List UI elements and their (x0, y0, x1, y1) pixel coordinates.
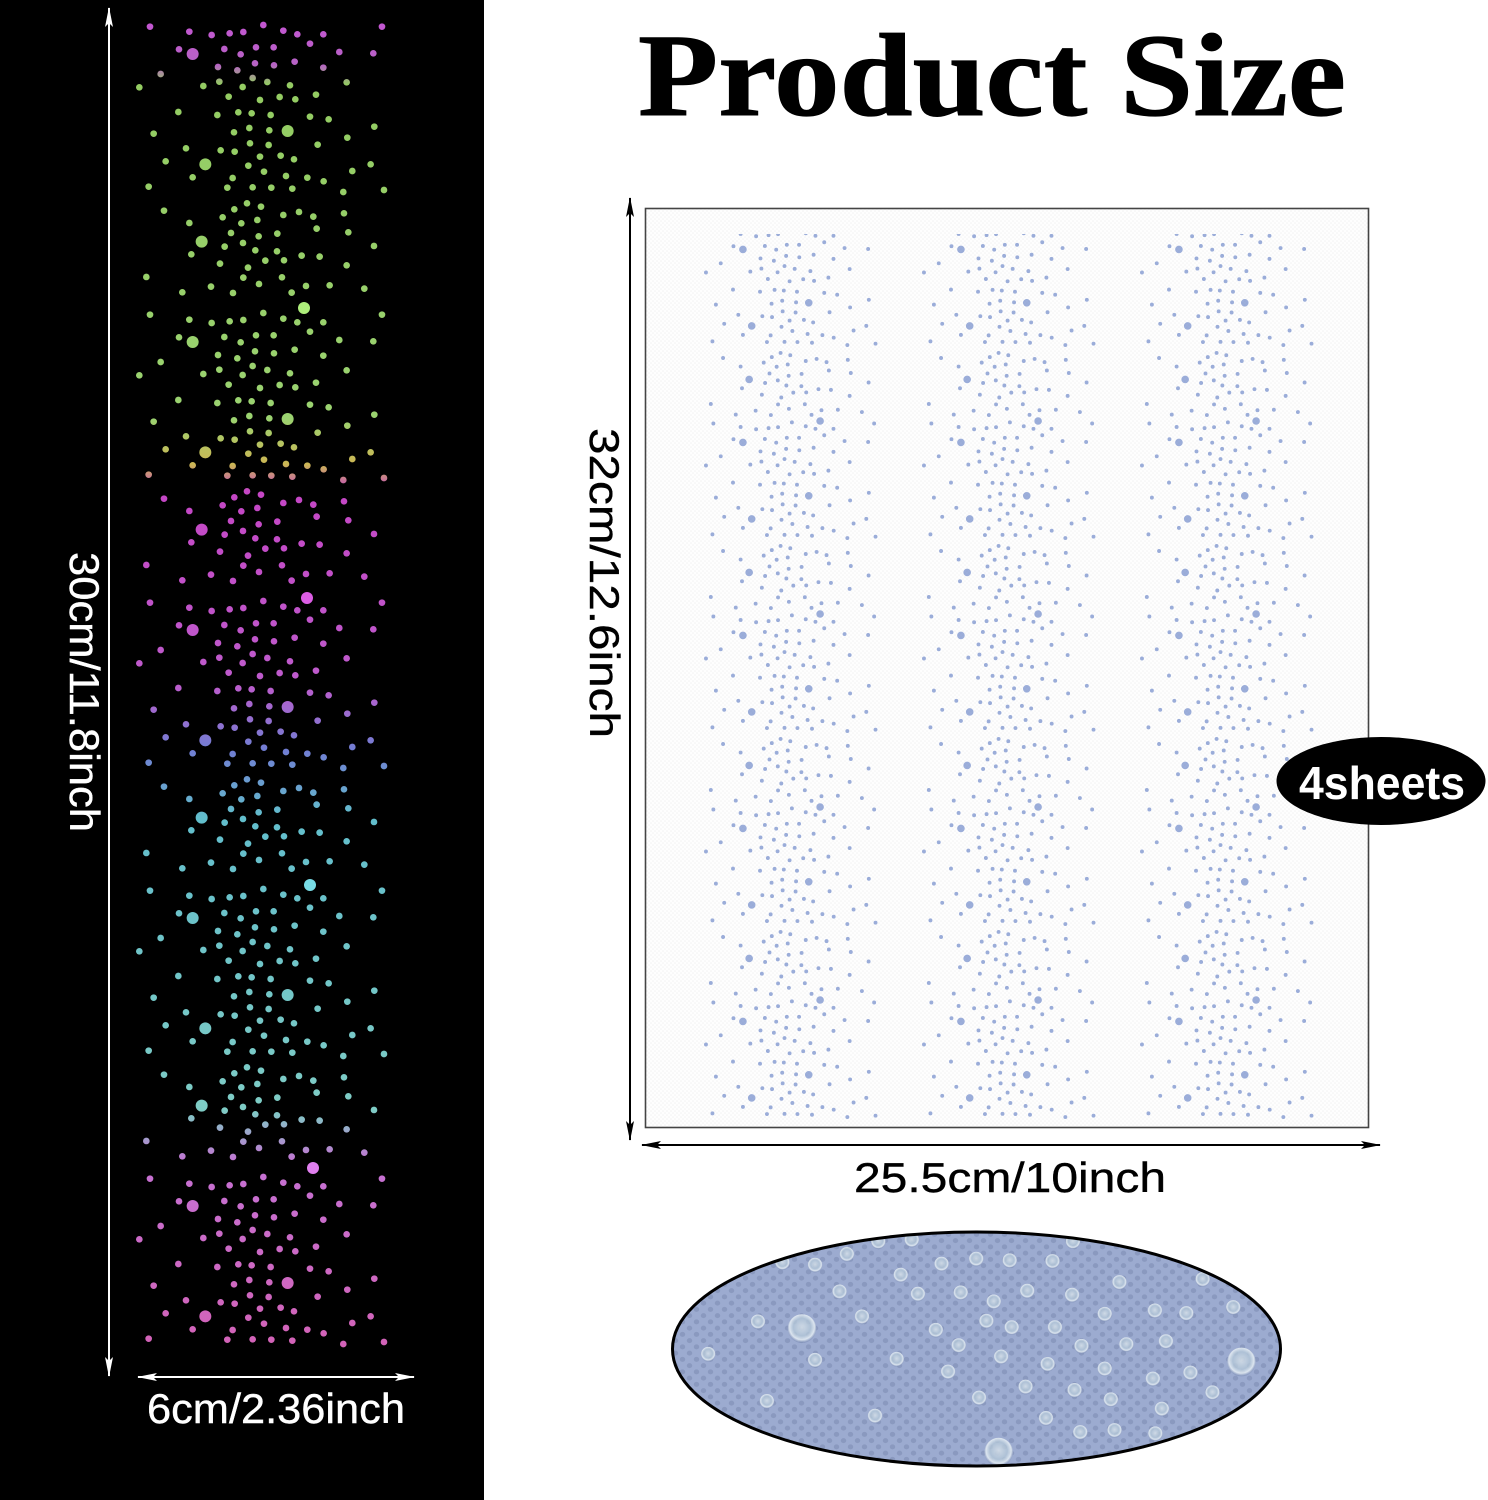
sheet rhinestone columns (700, 234, 1354, 1122)
panel: water droplet close-up (672, 1232, 1280, 1466)
droplets (701, 1233, 1256, 1466)
callout: sheet count: 4sheets (1299, 757, 1465, 809)
arrow: strip height (108, 8, 110, 1376)
callout: sheet count (1276, 737, 1486, 825)
arrow: strip width (138, 1376, 414, 1378)
panel: black strip sample (0, 0, 484, 1500)
title: Product Size (638, 10, 1346, 141)
label: strip width: 6cm/2.36inch (147, 1385, 405, 1432)
label: sheet height: 32cm/12.6inch (581, 428, 628, 738)
arrow: sheet height (629, 198, 631, 1140)
label: sheet width: 25.5cm/10inch (854, 1154, 1166, 1201)
panel: rhinestone sheet (646, 208, 1368, 1128)
label: strip height: 30cm/11.8inch (61, 552, 108, 832)
arrow: sheet width (642, 1144, 1380, 1146)
rhinestone strip (136, 22, 388, 1348)
